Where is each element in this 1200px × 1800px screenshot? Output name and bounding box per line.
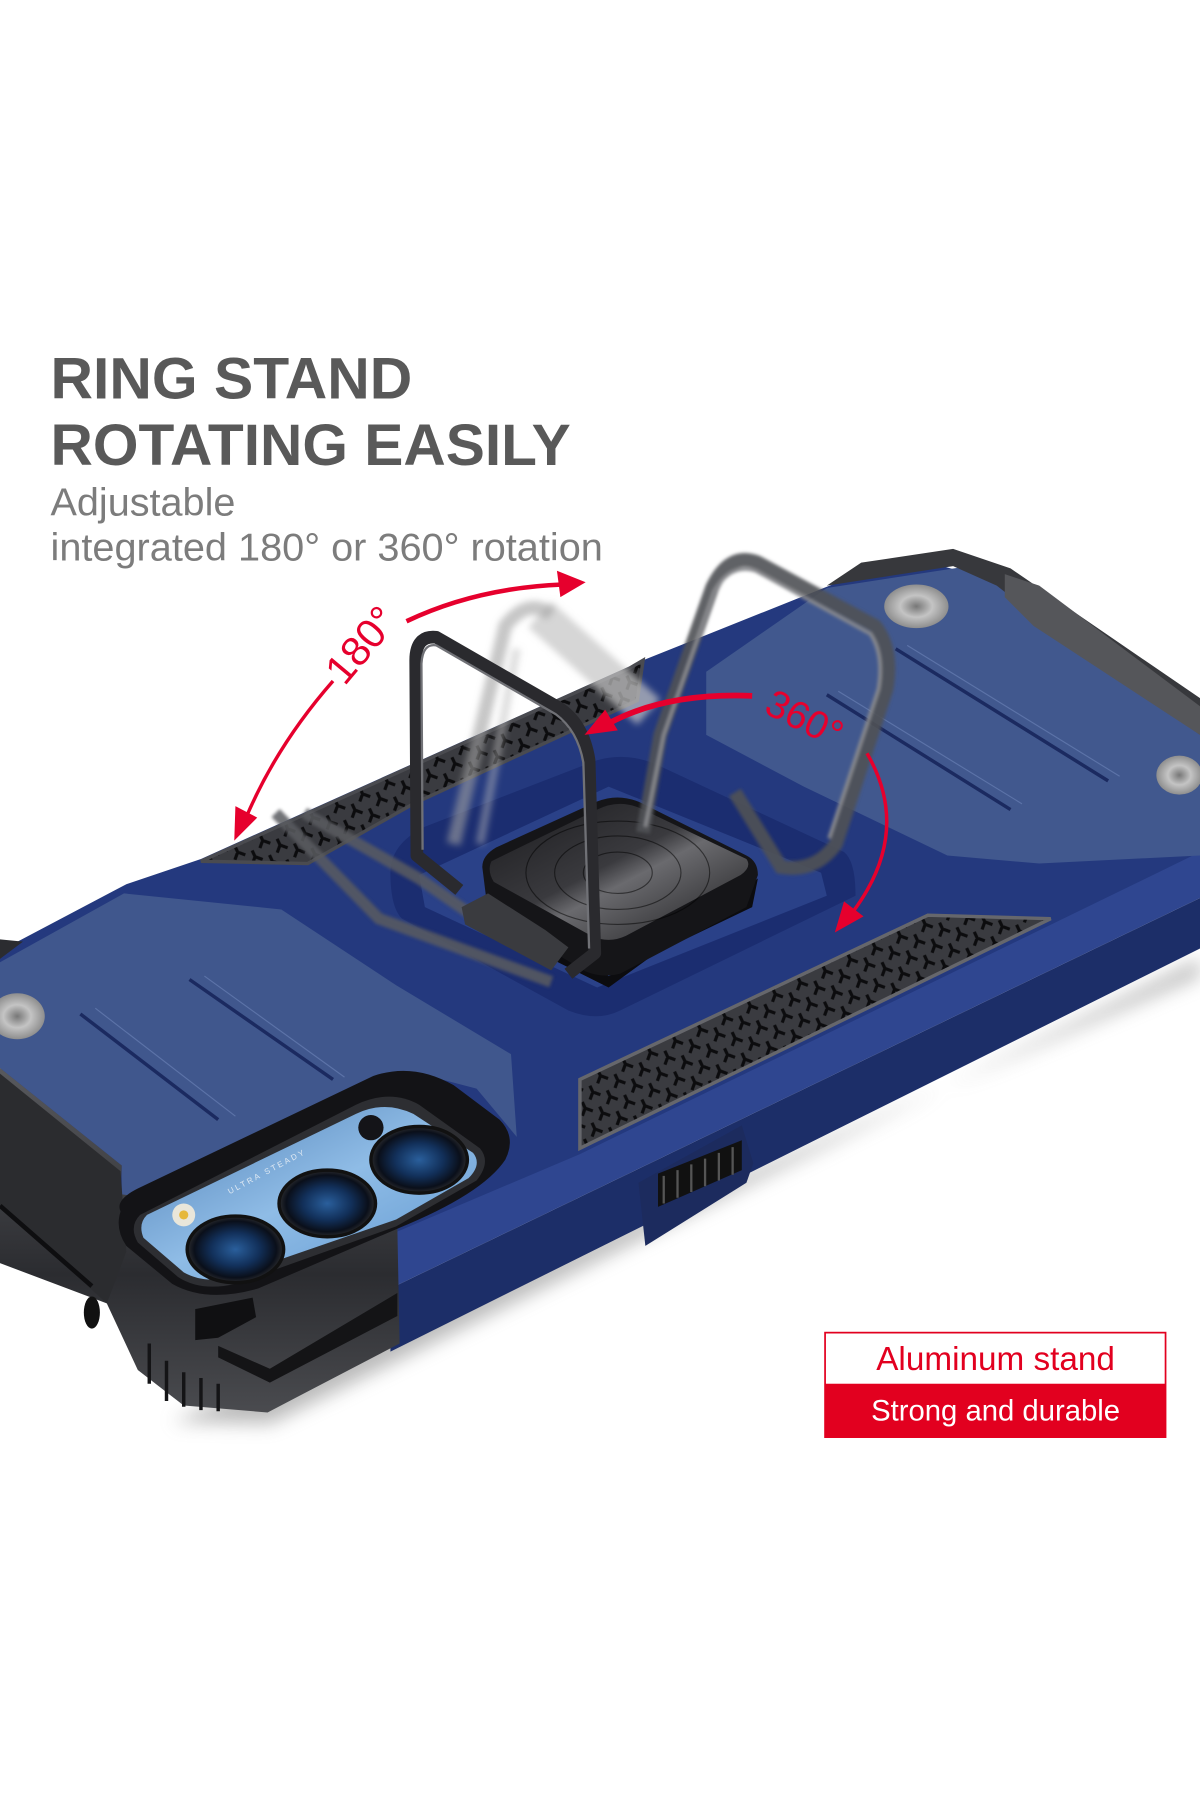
- label 360 degrees: 360°: [758, 682, 850, 757]
- title: [51, 346, 571, 478]
- black corner bumper: [0, 1068, 400, 1412]
- right plate: [706, 565, 1200, 864]
- title: RING STAND: [51, 346, 412, 411]
- label 180 degrees: 180°: [316, 597, 406, 692]
- ghost ring: [454, 608, 649, 844]
- blurred right ring: [643, 560, 888, 868]
- side wall upper band: [390, 852, 1200, 1288]
- left edge bumper: [0, 939, 23, 959]
- callout: aluminum stand: Aluminum stand: [876, 1341, 1115, 1378]
- top grip panel: [201, 660, 643, 864]
- screws: [0, 584, 1200, 1039]
- title: ROTATING EASILY: [51, 413, 571, 478]
- bottom grip panel: [580, 915, 1051, 1148]
- ring hinge: [462, 893, 568, 970]
- rotation arrows: [234, 571, 887, 932]
- ring recess: [390, 757, 856, 1016]
- left plate: [0, 893, 517, 1217]
- case face: [0, 559, 1200, 1234]
- top right bumper: [827, 549, 1200, 735]
- slots on plates: [80, 645, 1120, 1120]
- arrow: 360 upper: [584, 696, 752, 735]
- camera island: [119, 1071, 510, 1295]
- subtitle: [51, 482, 603, 569]
- flat blurred ring: [276, 813, 551, 982]
- subtitle: Adjustable: [51, 482, 235, 525]
- callout: aluminum stand: Strong and durable: [871, 1394, 1120, 1427]
- standing ring: [416, 637, 595, 974]
- arrow: 360 lower: [835, 753, 887, 932]
- ring base plate: [482, 797, 758, 976]
- lenses: [172, 1115, 467, 1283]
- ring hinge shadow: [505, 878, 758, 988]
- button recess: [638, 1125, 753, 1246]
- camera label: ULTRA STEADY: [226, 1147, 308, 1196]
- phone case illustration: [0, 549, 1200, 1424]
- callout: aluminum stand: [824, 1333, 1166, 1438]
- arrow: 180 lower: [234, 681, 333, 841]
- arrow: 180 upper: [407, 571, 586, 621]
- side wall lower band: [390, 898, 1200, 1352]
- subtitle: integrated 180° or 360° rotation: [51, 526, 603, 569]
- drop shadow: [172, 959, 1200, 1424]
